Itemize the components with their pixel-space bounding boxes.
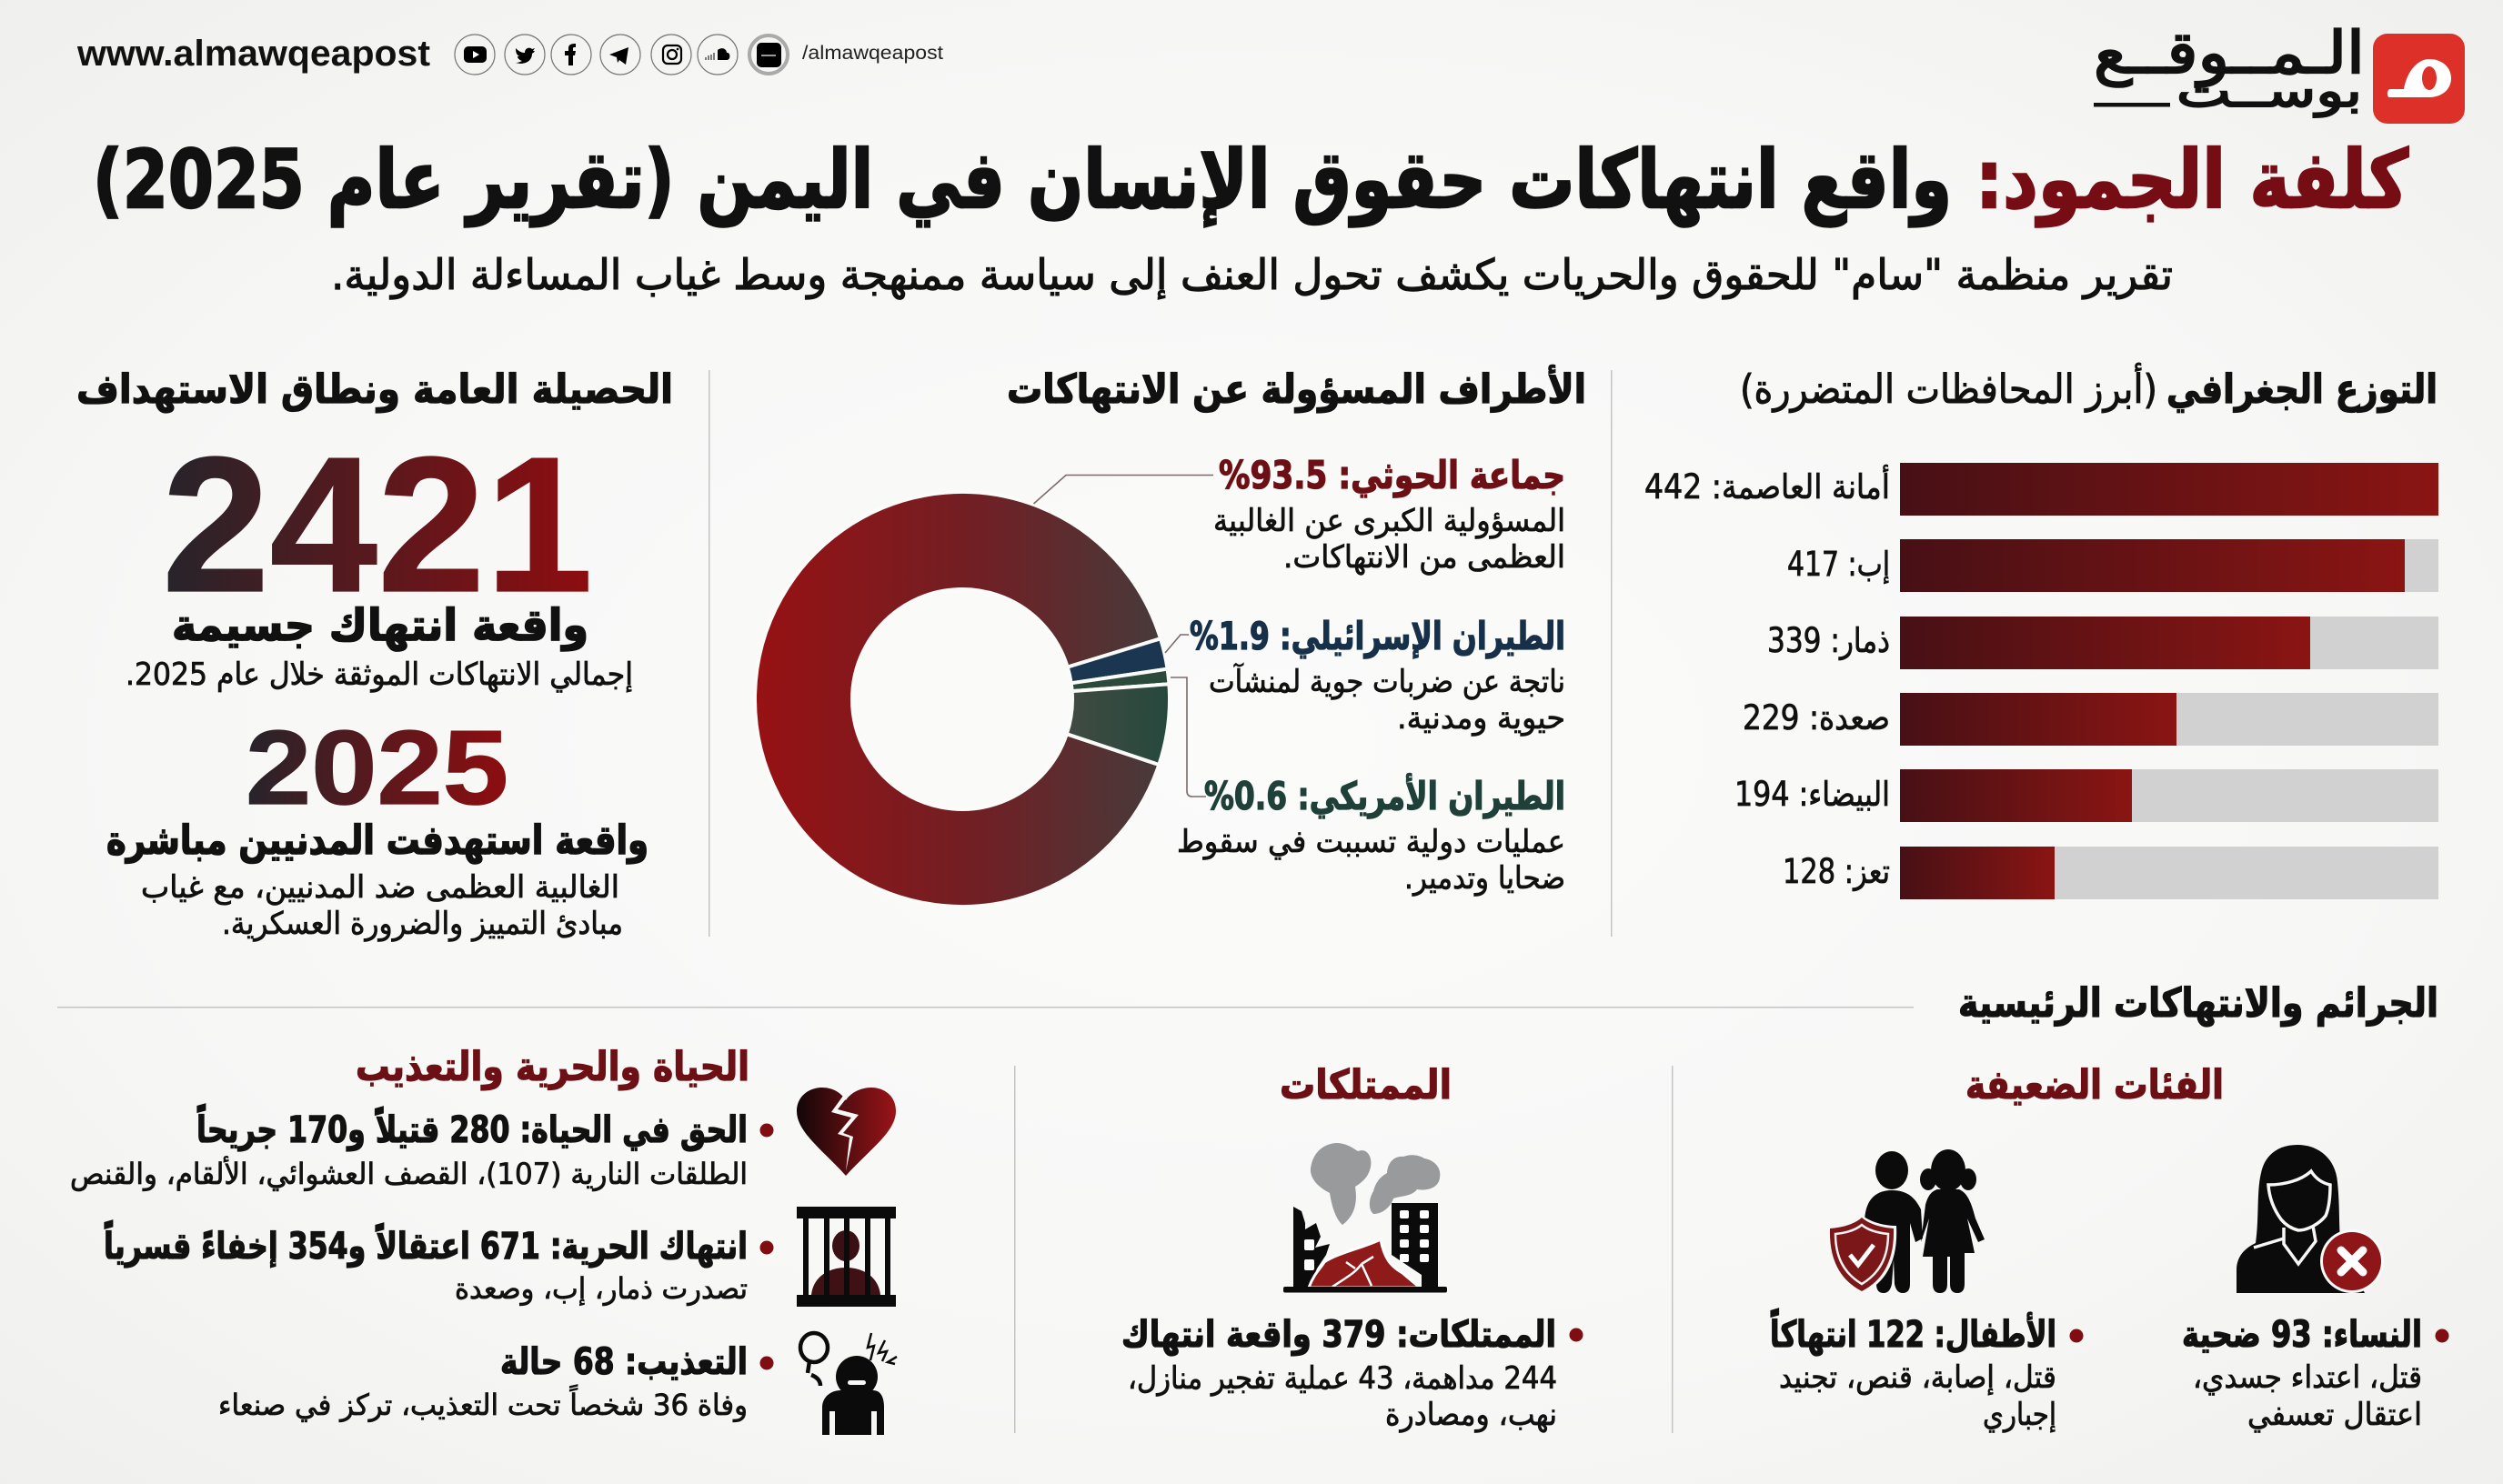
heading: overall toll: الحصيلة العامة ونطاق الاستهداف [76, 366, 673, 413]
bar: saada [1743, 693, 2438, 746]
big number: 2421: 2421 [162, 416, 593, 632]
social icons row [455, 35, 788, 75]
icon: instagram [651, 35, 691, 75]
legend: israeli aviation: ناتجة عن ضربات جوية لمنشآت [1209, 663, 1565, 700]
logo [2094, 20, 2465, 124]
bar: ibb [1787, 539, 2438, 592]
legend: houthi group: جماعة الحوثي: 93.5% [1219, 453, 1565, 498]
icon: telegram [600, 35, 640, 75]
item: women: قتل، اعتداء جسدي، [2193, 1359, 2422, 1396]
item: property violations: نهب، ومصادرة [1385, 1397, 1557, 1433]
label: targeted civilians: واقعة استهدفت المدنيين مباشرة [106, 817, 648, 864]
legend: israeli aviation [1190, 614, 1565, 737]
legend: american aviation [1177, 773, 1565, 897]
legend: israeli aviation: الطيران الإسرائيلي: 1.9% [1190, 614, 1565, 659]
item: right to life [70, 1103, 773, 1191]
subtitle: تقرير منظمة "سام" للحقوق والحريات يكشف تحول العنف إلى سياسة ممنهجة وسط غياب المساءلة الدولية. [331, 250, 2173, 300]
heading: geographic distribution: (أبرز المحافظات المتضررة) [1740, 363, 2157, 413]
description: civilians: مبادئ التمييز والضرورة العسكرية. [222, 906, 623, 942]
panel: overall toll [76, 366, 673, 942]
bar: amanat al asimah [1644, 463, 2438, 516]
icon: twitter [505, 35, 545, 75]
icon: facebook [551, 35, 591, 75]
bar: al bayda: البيضاء: 194 [1734, 775, 1890, 814]
bar: dhamar: ذمار: 339 [1767, 621, 1890, 660]
item: liberty: انتهاك الحرية: 671 اعتقالاً و354 إخفاءً قسرياً [104, 1219, 748, 1268]
legend: american aviation: الطيران الأمريكي: 0.6% [1204, 773, 1565, 819]
panel: life liberty torture [70, 1044, 897, 1435]
logo mark [2373, 34, 2465, 124]
item: right to life: الطلقات النارية (107)، القصف العشوائي، الألقام، والقنص [70, 1156, 748, 1191]
icon: torture [800, 1333, 897, 1435]
legend: american aviation: عمليات دولية تسببت في سقوط [1177, 824, 1565, 860]
heading: main crimes: الجرائم والانتهاكات الرئيسية [1958, 980, 2438, 1027]
panel: geographic distribution [1644, 363, 2438, 899]
item: children: إجباري [1983, 1397, 2056, 1433]
item: women [2182, 1314, 2448, 1433]
bar chart [1644, 463, 2438, 899]
bar: amanat al asimah: أمانة العاصمة: 442 [1644, 465, 1890, 506]
item: torture: التعذيب: 68 حالة [500, 1341, 748, 1383]
item: children [1770, 1308, 2083, 1433]
panel: property [1121, 1062, 1583, 1433]
heading: geographic distribution [1740, 363, 2438, 413]
big number: 2025: 2025 [246, 708, 508, 827]
item: women: اعتقال تعسفي [2247, 1397, 2422, 1433]
bar: ibb: إب: 417 [1787, 545, 1890, 584]
icon: children with shield [1827, 1149, 1985, 1294]
heading: vulnerable groups: الفئات الضعيفة [1965, 1062, 2224, 1108]
item: torture: وفاة 36 شخصاً تحت التعذيب، تركز في صنعاء [218, 1384, 748, 1422]
website address: www.almawqeapost [76, 34, 430, 74]
icon: channel badge [749, 35, 788, 74]
leader lines [1033, 475, 1213, 797]
icon: broken heart [797, 1088, 896, 1176]
title: كلفة الجمود: [1975, 133, 2409, 227]
legend: houthi group [1213, 453, 1565, 576]
item: liberty: تصدرت ذمار، إب، وصعدة [455, 1271, 748, 1306]
icon: destroyed buildings [1283, 1143, 1447, 1293]
legend: houthi group: العظمى من الانتهاكات. [1283, 539, 1565, 576]
item: right to life: الحق في الحياة: 280 قتيلاً و170 جريحاً [196, 1103, 748, 1151]
label: serious violations: واقعة انتهاك جسيمة [172, 600, 588, 651]
title: واقع انتهاكات حقوق الإنسان في اليمن (تقرير عام 2025) [93, 133, 1952, 227]
bar: saada: صعدة: 229 [1743, 698, 1890, 737]
legend: israeli aviation: حيوية ومدنية. [1397, 700, 1565, 737]
icon: prison bars [797, 1207, 896, 1307]
logo wordmark: الـمــوقــع [2094, 20, 2365, 87]
item: women: النساء: 93 ضحية [2182, 1314, 2422, 1356]
item: children: الأطفال: 122 انتهاكاً [1770, 1308, 2056, 1356]
panel: vulnerable groups [1770, 1062, 2448, 1433]
item: property violations [1121, 1314, 1583, 1433]
legend: american aviation: ضحايا وتدمير. [1404, 860, 1565, 897]
logo wordmark: بوســت [2176, 65, 2362, 117]
legend: houthi group: المسؤولية الكبرى عن الغالبية [1213, 503, 1565, 539]
bar: dhamar [1767, 617, 2438, 669]
social handle: /almawqeapost [802, 43, 943, 64]
icon: woman [2237, 1145, 2384, 1293]
item: property violations: الممتلكات: 379 واقعة انتهاك [1121, 1314, 1556, 1356]
description: total violations: إجمالي الانتهاكات الموثقة خلال عام 2025. [126, 657, 633, 693]
bar: taiz: تعز: 128 [1783, 852, 1890, 891]
heading: responsible parties: الأطراف المسؤولة عن الانتهاكات [1007, 365, 1586, 413]
icon: soundcloud [698, 35, 738, 75]
heading: life liberty torture: الحياة والحرية والتعذيب [356, 1044, 749, 1090]
donut chart [755, 492, 1170, 907]
bar: al bayda [1734, 769, 2438, 822]
heading: geographic distribution: التوزع الجغرافي [2166, 366, 2438, 413]
heading: property: الممتلكات [1280, 1062, 1452, 1108]
item: children: قتل، إصابة، قنص، تجنيد [1779, 1359, 2056, 1396]
bar: taiz [1783, 847, 2438, 899]
panel: responsible parties [755, 365, 1586, 907]
icon: youtube [455, 35, 495, 75]
logo wordmark [2094, 20, 2365, 117]
description: civilians: الغالبية العظمى ضد المدنيين، مع غياب [141, 869, 619, 906]
item: liberty [104, 1219, 773, 1306]
item: torture [218, 1341, 773, 1422]
item: property violations: 244 مداهمة، 43 عملية تفجير منازل، [1128, 1360, 1557, 1397]
description: civilians [141, 869, 623, 942]
